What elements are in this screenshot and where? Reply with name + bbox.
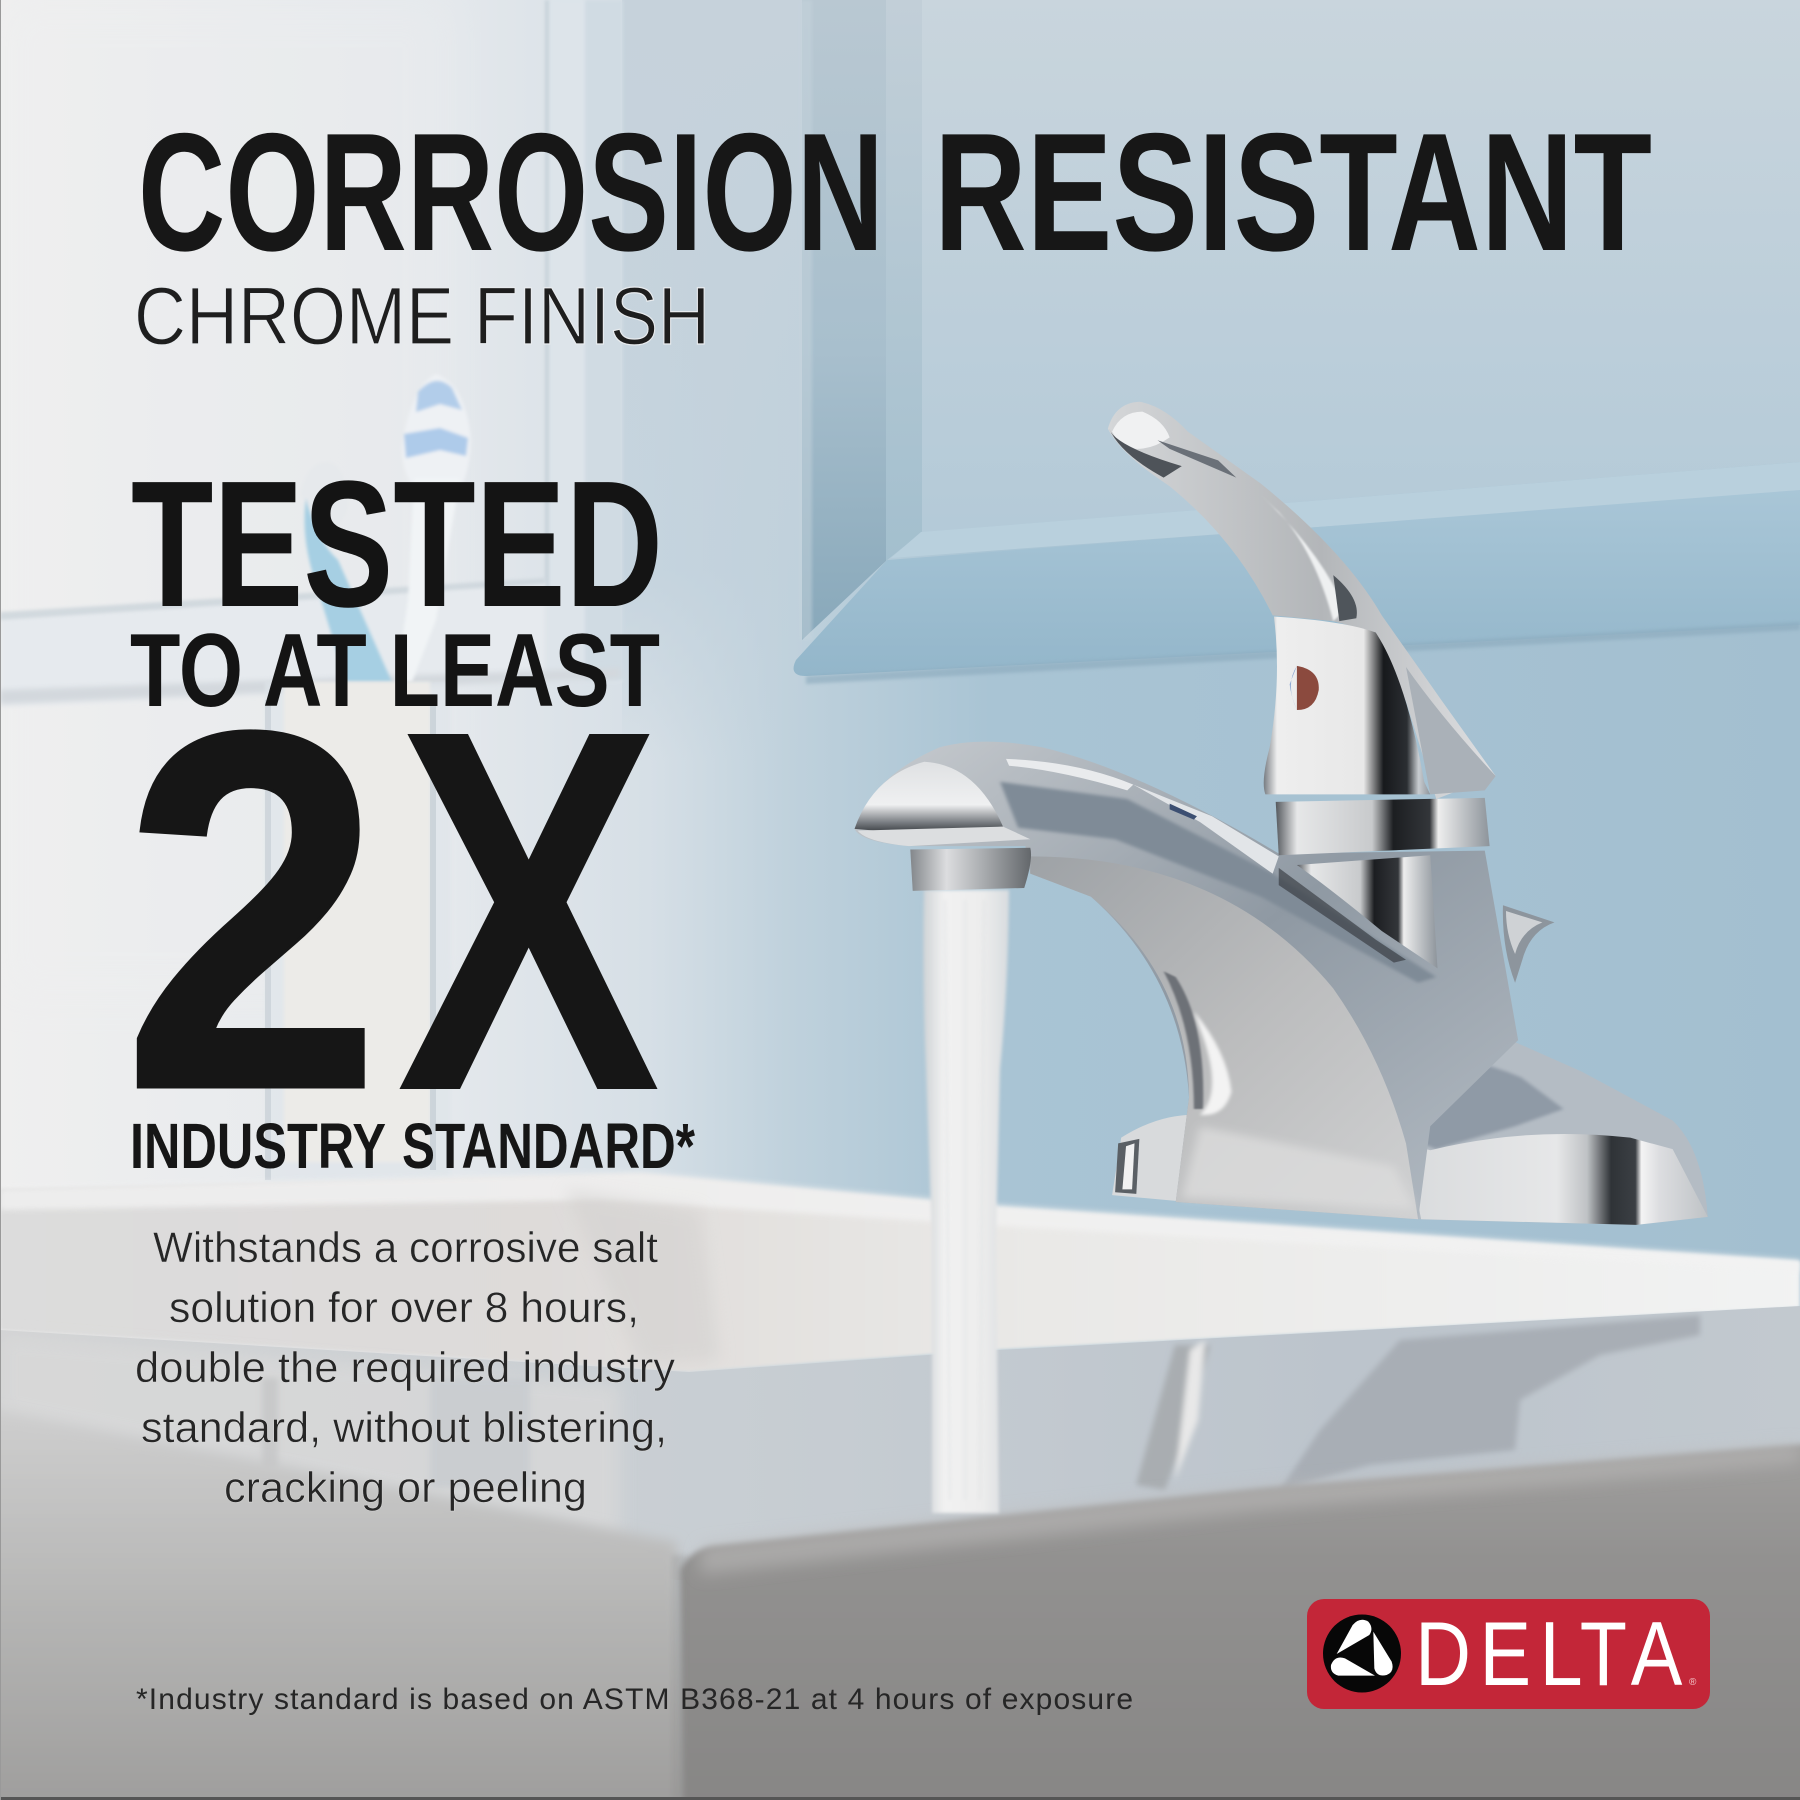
description text: standard, without blistering,	[141, 1404, 667, 1452]
claim: 2X	[122, 623, 663, 1199]
claim: industry standard: STANDARD*	[402, 1110, 695, 1182]
lower neck	[1297, 855, 1438, 968]
logo: Delta	[1307, 1599, 1710, 1709]
description text	[135, 1224, 675, 1512]
registered mark: ®	[1689, 1677, 1697, 1688]
wall panel top right	[921, 0, 1800, 532]
description text: solution for over 8 hours,	[169, 1284, 639, 1332]
handle body	[1264, 616, 1430, 794]
toothbrush left	[300, 462, 392, 682]
description text: double the required industry	[135, 1344, 675, 1392]
neck ring	[1276, 798, 1490, 855]
frame vertical band	[802, 0, 886, 640]
sink front right face	[680, 1442, 1800, 1800]
logo wordmark: DELTA	[1415, 1603, 1683, 1704]
base left foot	[1112, 1115, 1194, 1202]
main title	[138, 98, 1652, 286]
cup reflection	[262, 1378, 530, 1488]
faucet	[855, 402, 1708, 1225]
faucet reflection	[1136, 1315, 1700, 1490]
footnote: *Industry standard is based on ASTM B368-21 at 4 hours of exposure	[136, 1683, 1133, 1716]
description text: Withstands a corrosive salt	[153, 1224, 658, 1272]
wall recess between mouldings	[622, 0, 802, 760]
toothbrush right	[396, 374, 471, 682]
water stream	[923, 890, 1009, 1513]
base right plate	[1370, 1029, 1708, 1225]
sink front left face	[0, 1406, 690, 1800]
claim: industry standard	[130, 1110, 695, 1182]
sink white rim	[0, 1174, 1800, 1372]
hot indicator	[1297, 666, 1319, 710]
cup	[265, 682, 451, 1182]
drain lever	[1503, 905, 1554, 983]
aerator	[910, 848, 1031, 891]
claim: tested: TESTED	[131, 444, 663, 645]
claim: industry standard: INDUSTRY	[130, 1110, 386, 1182]
sink basin	[0, 1306, 1800, 1580]
spout dome	[855, 762, 1003, 833]
main title: CORROSION	[138, 98, 884, 286]
spout body	[855, 742, 1518, 1219]
spout front face	[1030, 856, 1418, 1219]
spout upper reflections	[1000, 782, 1436, 983]
claim: 2X: X	[396, 623, 663, 1199]
handle arm	[1108, 402, 1496, 799]
left horizontal moulding	[0, 582, 545, 706]
subtitle: CHROME FINISH	[134, 271, 710, 362]
frame horizontal moulding	[891, 462, 1800, 558]
claim: 2X: 2	[122, 626, 382, 1196]
left vertical moulding	[545, 0, 623, 682]
claim: to at least: TO AT LEAST	[130, 613, 660, 729]
icon: delta triangle mark	[1323, 1614, 1401, 1692]
description text: cracking or peeling	[224, 1464, 587, 1512]
